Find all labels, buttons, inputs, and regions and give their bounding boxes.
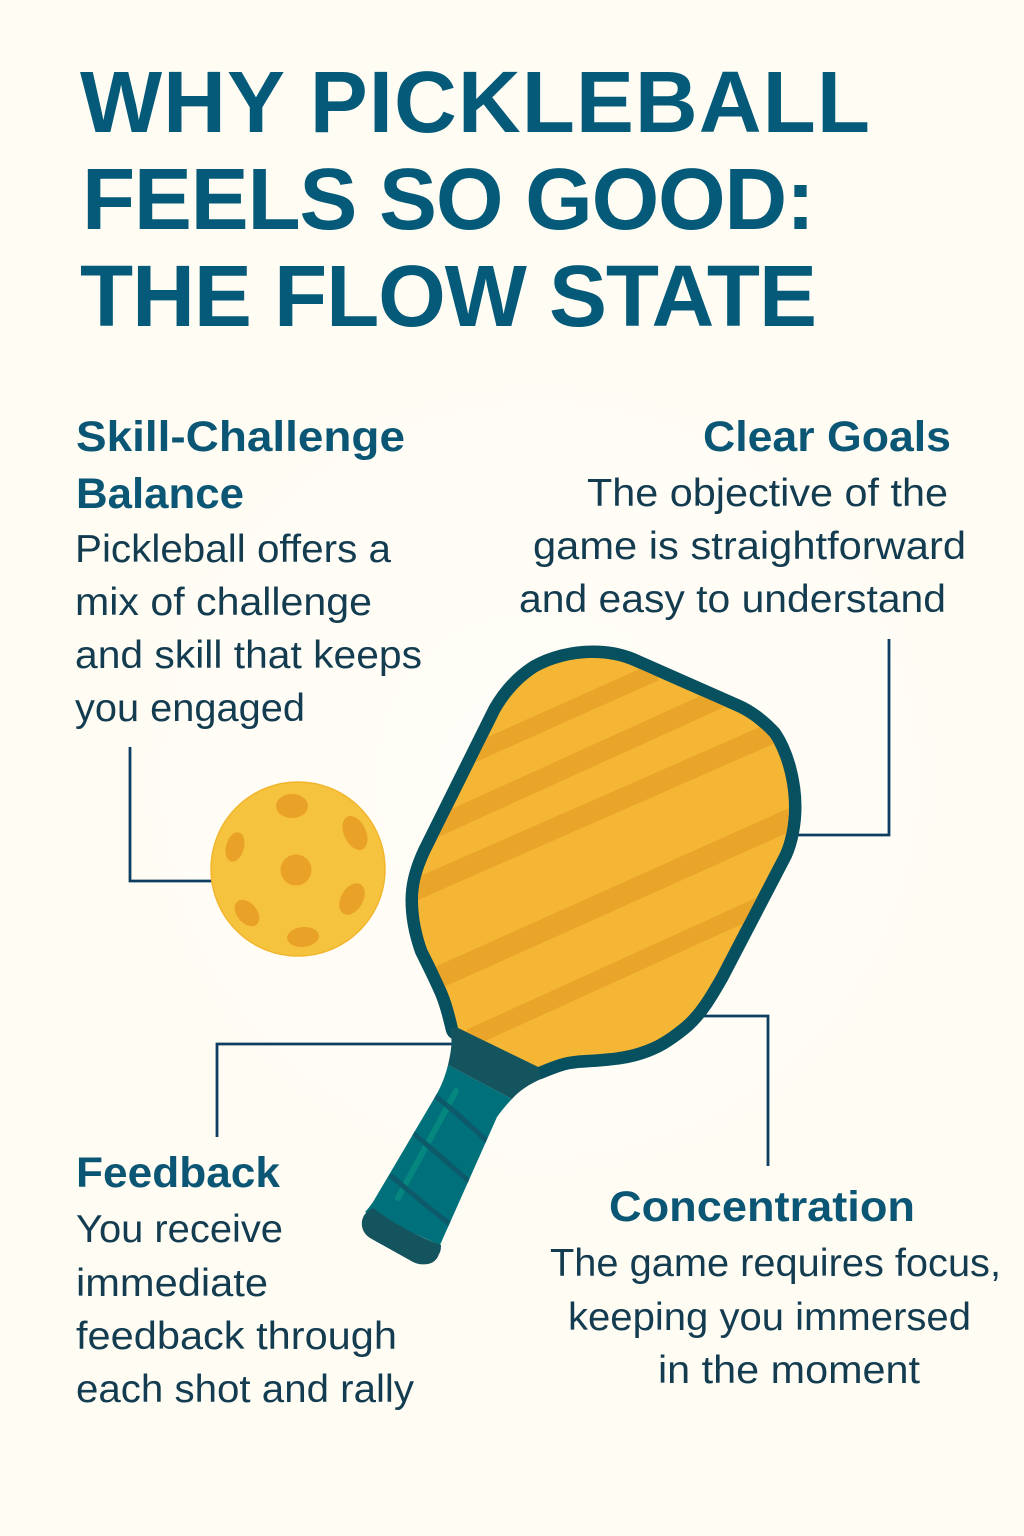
text block: concentration: [550, 1183, 1001, 1392]
text block: concentration: Concentration: [609, 1183, 915, 1231]
connector: concentration to paddle: [700, 1016, 768, 1166]
connector: feedback to paddle: [217, 1044, 452, 1137]
text block: skill-challenge balance: mix of challenge: [75, 581, 372, 624]
paddle face: [418, 658, 789, 1067]
text block: feedback: Feedback: [76, 1149, 280, 1197]
text block: clear goals: Clear Goals: [703, 413, 951, 461]
text block: feedback: immediate: [76, 1262, 268, 1305]
text block: concentration: in the moment: [658, 1349, 920, 1392]
text block: feedback: [76, 1149, 415, 1411]
grip wraps: [390, 1095, 490, 1225]
paddle handle grip: [365, 1065, 512, 1245]
text block: skill-challenge balance: and skill that keeps: [75, 634, 422, 677]
text block: feedback: each shot and rally: [76, 1368, 415, 1411]
text block: feedback: You receive: [76, 1208, 283, 1251]
text block: feedback: feedback through: [76, 1315, 397, 1358]
text block: skill-challenge balance: [75, 413, 422, 730]
text block: concentration: keeping you immersed: [568, 1296, 971, 1339]
text block: skill-challenge balance: Balance: [76, 470, 244, 518]
icon: pickleball: [211, 782, 385, 956]
text block: clear goals: The objective of the: [587, 472, 948, 515]
title: FEELS SO GOOD:: [82, 151, 815, 248]
title: THE FLOW STATE: [80, 248, 817, 345]
connector: clear goals to paddle: [798, 639, 889, 835]
title: WHY PICKLEBALL: [80, 54, 870, 151]
text block: clear goals: and easy to understand: [519, 578, 946, 621]
text block: skill-challenge balance: Skill-Challenge: [76, 413, 405, 461]
connector: skill-challenge to ball: [130, 747, 213, 881]
paddle stripes: [410, 672, 798, 1038]
text block: clear goals: game is straightforward: [533, 525, 966, 568]
text block: skill-challenge balance: you engaged: [75, 687, 305, 730]
grip highlight: [398, 1091, 456, 1198]
paddle collar: [448, 1028, 541, 1099]
text block: skill-challenge balance: Pickleball offers a: [75, 528, 391, 571]
text block: clear goals: [519, 413, 966, 621]
background glow: [140, 380, 940, 1180]
paddle frame: [418, 658, 789, 1067]
icon: pickleball paddle: [362, 658, 798, 1264]
handle butt cap: [362, 1208, 441, 1264]
title: [80, 54, 870, 345]
text block: concentration: The game requires focus,: [550, 1242, 1001, 1285]
